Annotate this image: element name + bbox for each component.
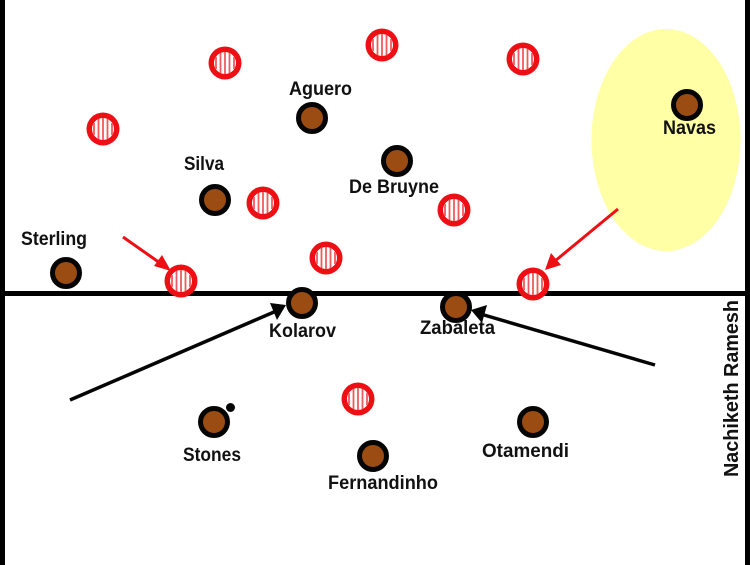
author credit: Nachiketh Ramesh (721, 300, 743, 477)
highlight ellipse around Navas (592, 29, 740, 251)
player names: Stones (183, 445, 241, 466)
player names: Silva (184, 154, 224, 175)
player names: Navas (663, 118, 716, 139)
home players (52, 92, 700, 470)
player names: Kolarov (269, 321, 336, 342)
black arrow to Kolarov (70, 303, 286, 400)
red arrow to right opponent (545, 209, 618, 270)
player names: Aguero (289, 79, 352, 100)
ball (226, 403, 235, 412)
black arrow to Zabaleta (471, 305, 655, 365)
opposition players (86, 28, 550, 416)
player names (21, 79, 716, 494)
player names: De Bruyne (349, 177, 439, 198)
player names: Fernandinho (328, 473, 438, 494)
player names: Sterling (21, 229, 87, 250)
player names: Otamendi (482, 441, 569, 462)
red arrow to left opponent (123, 237, 171, 271)
player names: Zabaleta (420, 318, 495, 339)
